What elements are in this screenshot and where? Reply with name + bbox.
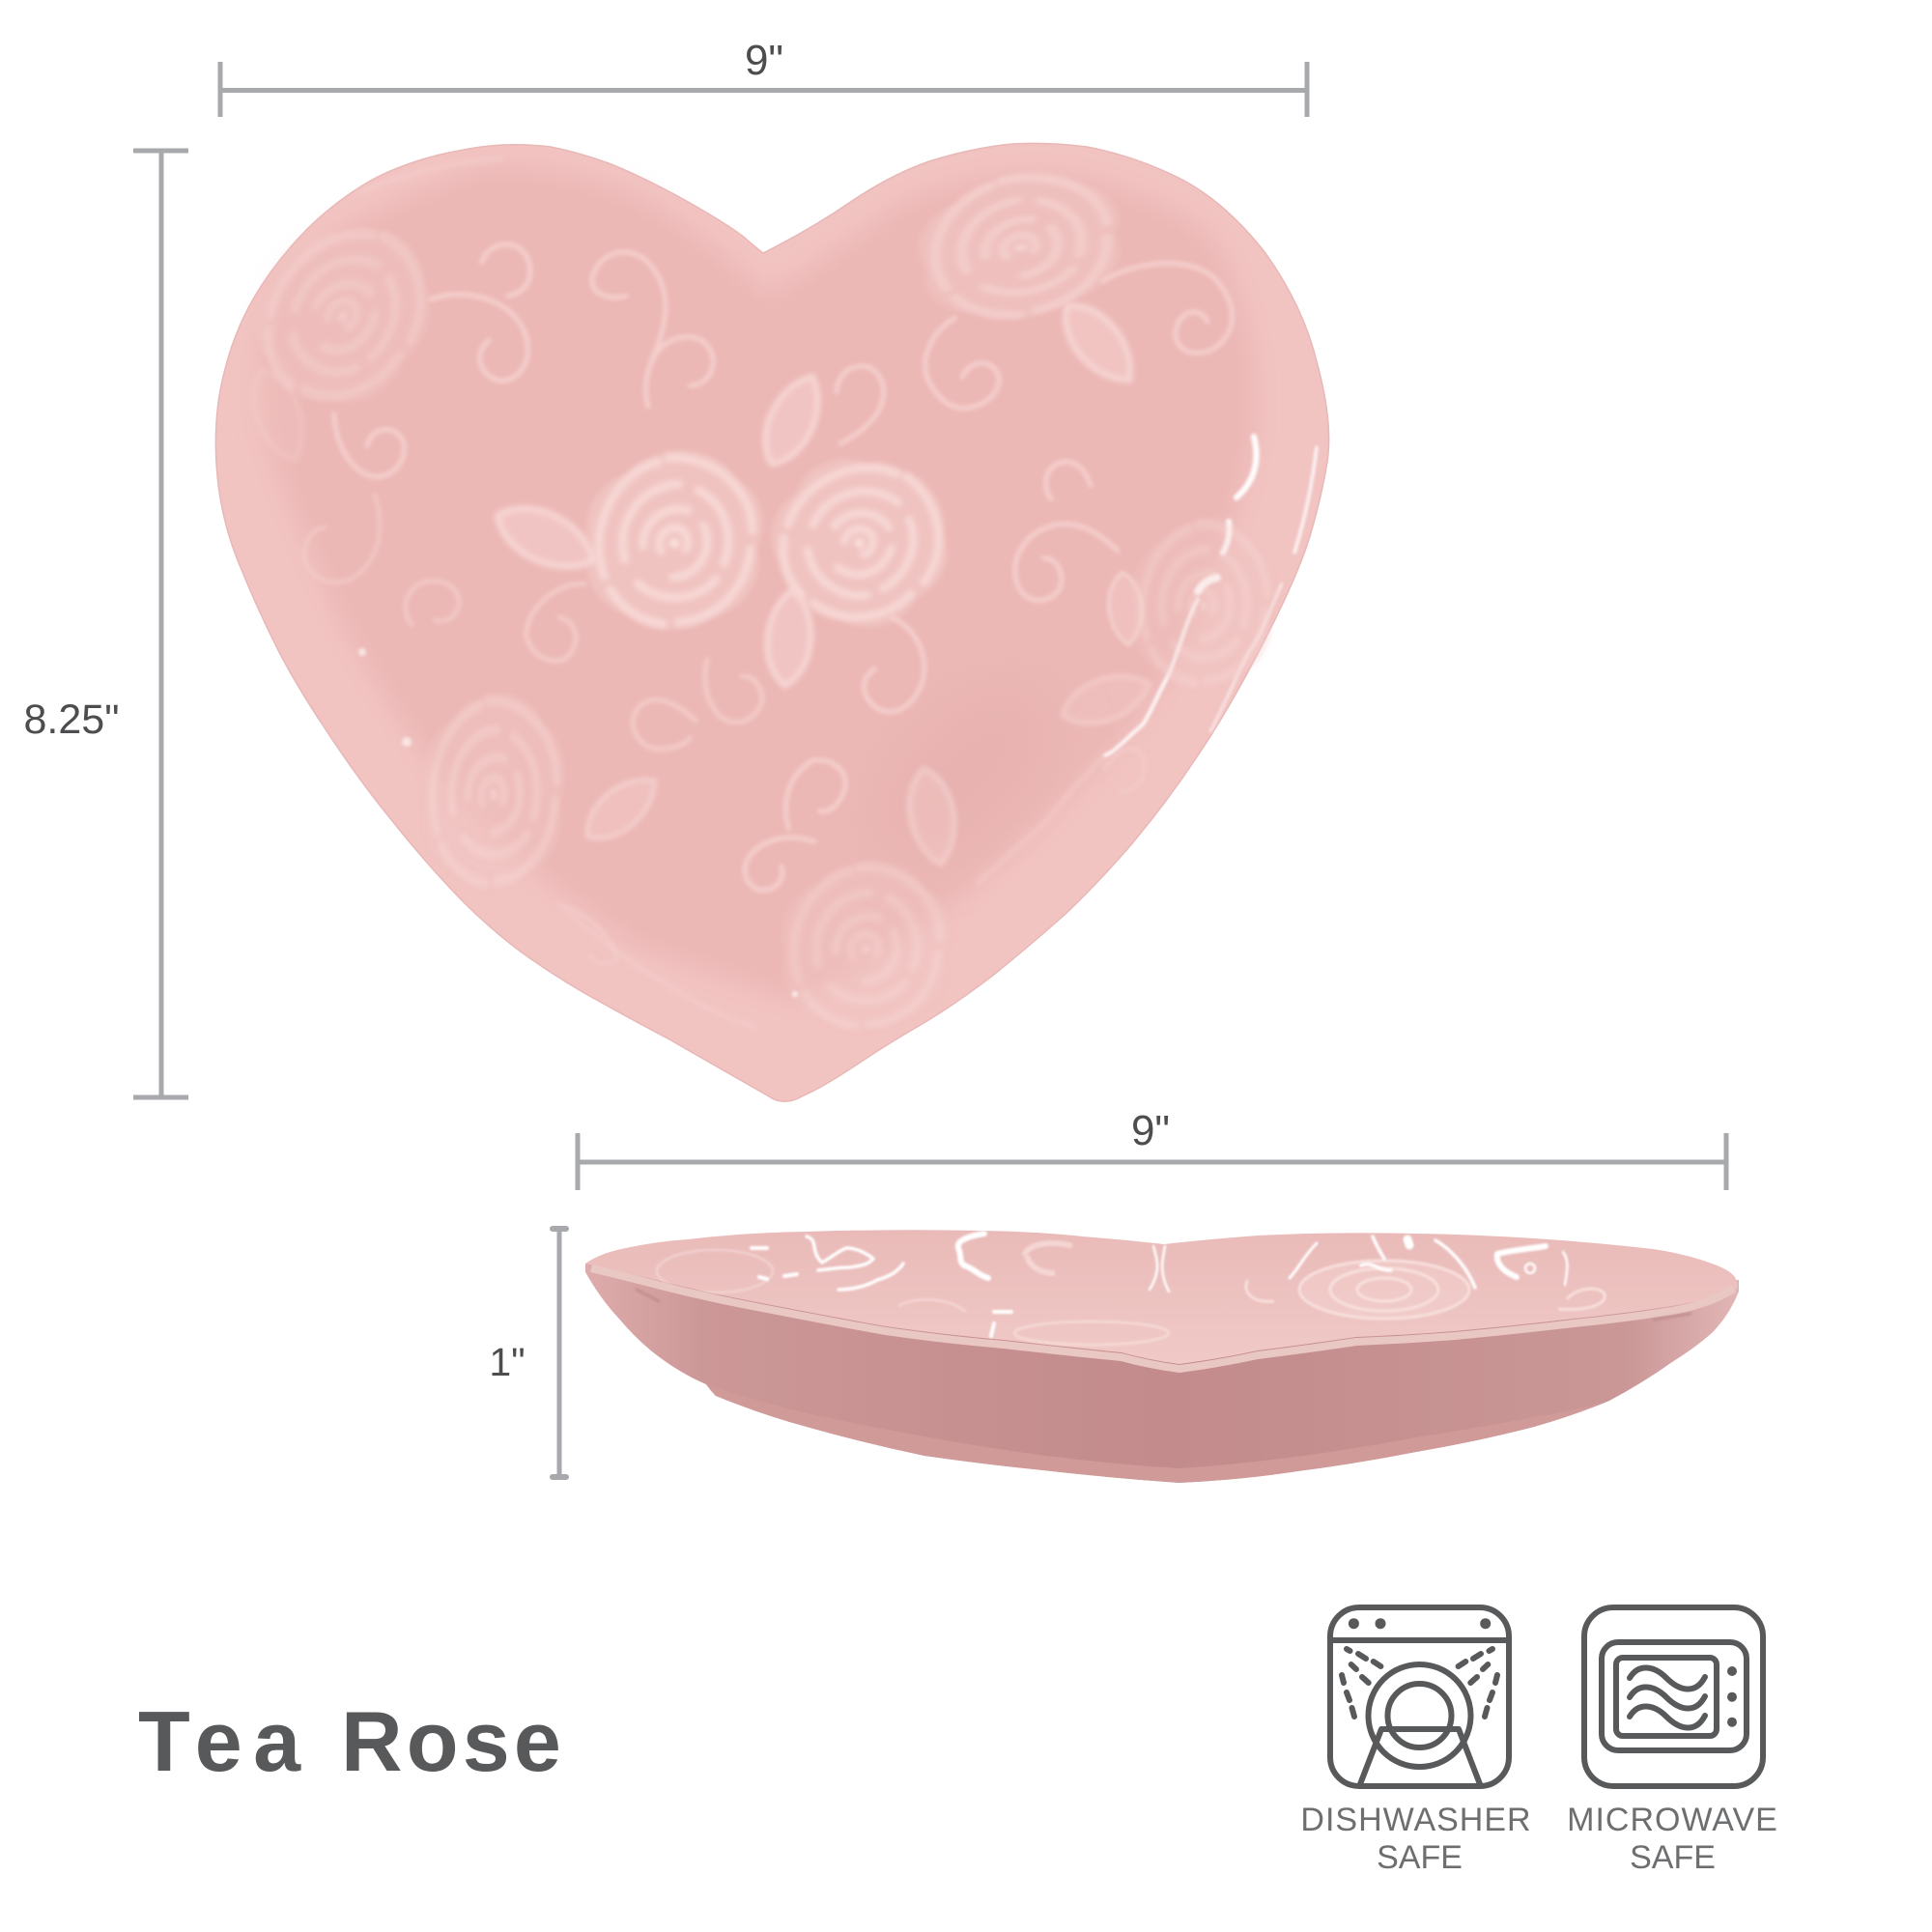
roses (228, 156, 1275, 1031)
title: Tea Rose: Tea (138, 1693, 312, 1789)
label: 1 inch: 1" (489, 1340, 526, 1384)
icon: microwave safe (1567, 1607, 1778, 1876)
plate silhouette (215, 143, 1329, 1101)
leaf: top right (1051, 292, 1146, 394)
rose: center right (742, 422, 980, 661)
dimension: plate depth 1 inch (489, 1229, 566, 1477)
leaf: right upper (1106, 571, 1145, 646)
rose: bottom (781, 861, 950, 1031)
leaf: right lower (1056, 665, 1156, 734)
rim ridge highlights (357, 158, 1105, 1028)
outer wall (585, 1264, 1739, 1483)
inner surface (585, 1230, 1737, 1364)
label: microwave safe: SAFE (1630, 1839, 1716, 1876)
rose: top right (909, 156, 1132, 334)
leaf: bottom (902, 765, 962, 867)
label: 9 inches: 9" (745, 37, 783, 84)
dimension: plate width 9 inches (220, 37, 1307, 117)
label: dishwasher safe: DISHWASHER (1300, 1802, 1532, 1838)
rim edge (591, 1268, 1734, 1369)
plate well (261, 166, 1256, 1001)
dimension: bowl view width 9 inches (578, 1107, 1726, 1190)
label: microwave safe: MICROWAVE (1567, 1802, 1778, 1838)
specular highlights (752, 1234, 1567, 1336)
leaf: top left (242, 362, 315, 469)
rose: right (1132, 518, 1275, 688)
photo: heart plate top view (215, 143, 1329, 1101)
wall sheen (637, 1290, 1690, 1320)
label: dishwasher safe: SAFE (1377, 1839, 1463, 1876)
leaf: center lower (763, 587, 815, 688)
rose: center left (586, 451, 763, 630)
label: 9 inches: 9" (1131, 1107, 1170, 1154)
photo: heart plate side view (585, 1230, 1739, 1483)
dimension: plate height 8.25 inches (24, 151, 188, 1097)
label: 8.25 inches: 8.25" (24, 696, 119, 743)
darker lower right of well (850, 657, 1082, 889)
leaves (242, 292, 1156, 867)
icon: dishwasher safe (1300, 1607, 1532, 1876)
rose: bottom left (422, 694, 565, 889)
leaf: center left (488, 494, 604, 582)
rose: top left (228, 192, 461, 435)
leaf: bottom left (576, 766, 667, 851)
leaf: center upper (752, 367, 833, 473)
glaze highlights (358, 437, 1317, 997)
foot ring (706, 1384, 1609, 1483)
scroll vines (304, 244, 1233, 964)
embossed roses on inner surface (657, 1243, 1605, 1345)
title: Tea Rose: Rose (341, 1693, 565, 1789)
